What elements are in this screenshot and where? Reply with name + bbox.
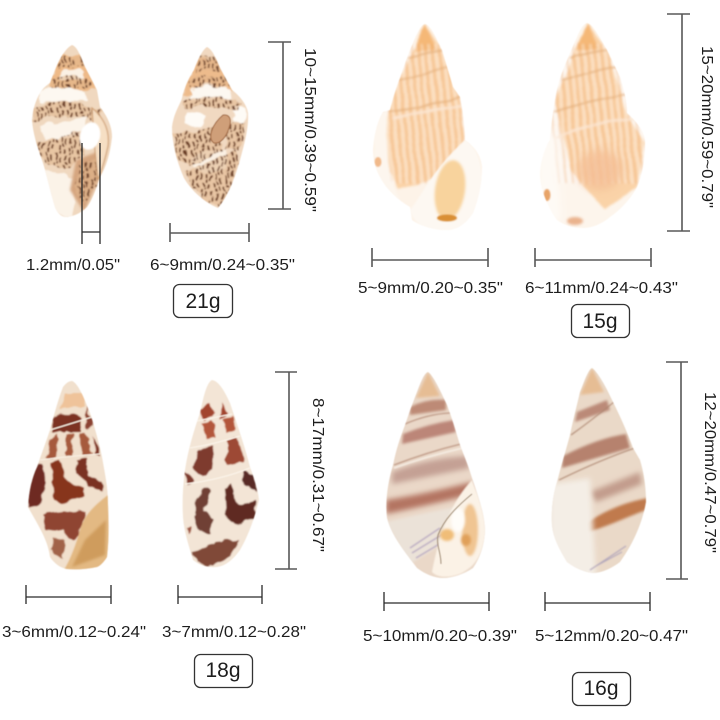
width bar	[170, 223, 249, 242]
label: width: 5~9mm/0.20~0.35"	[358, 280, 503, 297]
panel: dark brown shell, bottom left	[2, 372, 326, 688]
height bar	[667, 14, 690, 231]
label: width: 5~10mm/0.20~0.39"	[363, 628, 517, 645]
label: width: 3~7mm/0.12~0.28"	[162, 624, 306, 641]
width bar	[535, 248, 651, 267]
weight badge: 21g	[174, 284, 232, 318]
weight badge: 21g: 21g	[185, 290, 221, 313]
shell photo: orange shell front view	[370, 20, 485, 235]
label: height: 8~17mm/0.31~0.67"	[309, 398, 326, 552]
shell photo: brown shell front view	[28, 380, 110, 570]
shell photo: speckled shell front view	[32, 44, 112, 218]
label: height: 10~15mm/0.39~0.59"	[301, 48, 318, 212]
label: width: 6~9mm/0.24~0.35"	[150, 257, 295, 274]
width bar	[372, 248, 488, 267]
weight badge: 18g: 18g	[205, 659, 241, 682]
label: width: 6~11mm/0.24~0.43"	[525, 280, 678, 297]
panel: orange shell, top right	[358, 14, 715, 338]
height bar	[666, 362, 688, 579]
weight badge: 15g	[572, 304, 630, 338]
shell photo: brown shell back view	[182, 380, 260, 568]
label: hole size: 1.2mm/0.05"	[26, 257, 120, 274]
label: height: 12~20mm/0.47~0.79"	[701, 392, 718, 553]
shell photo: striped shell front view	[386, 372, 486, 578]
width bar	[384, 592, 489, 611]
shell thickness lines	[82, 143, 100, 244]
panel: speckled shell, top left	[25, 40, 318, 318]
width bar	[178, 585, 262, 604]
label: width: 3~6mm/0.12~0.24"	[2, 624, 146, 641]
weight badge: 18g	[194, 654, 252, 688]
shell photo: orange shell back view	[540, 22, 646, 228]
panel: striped shell, bottom right	[363, 362, 718, 706]
shell photo: striped shell back view	[548, 364, 650, 578]
weight badge: 16g: 16g	[583, 677, 619, 700]
label: height: 15~20mm/0.59~0.79"	[698, 46, 715, 208]
width bar	[26, 585, 111, 604]
weight badge: 15g: 15g	[582, 310, 618, 333]
label: width: 5~12mm/0.20~0.47"	[535, 628, 688, 645]
width bar	[545, 592, 650, 611]
height bar	[275, 372, 297, 569]
height bar	[268, 42, 291, 209]
shell photo: speckled shell back view	[172, 46, 248, 208]
weight badge: 16g	[572, 672, 630, 706]
